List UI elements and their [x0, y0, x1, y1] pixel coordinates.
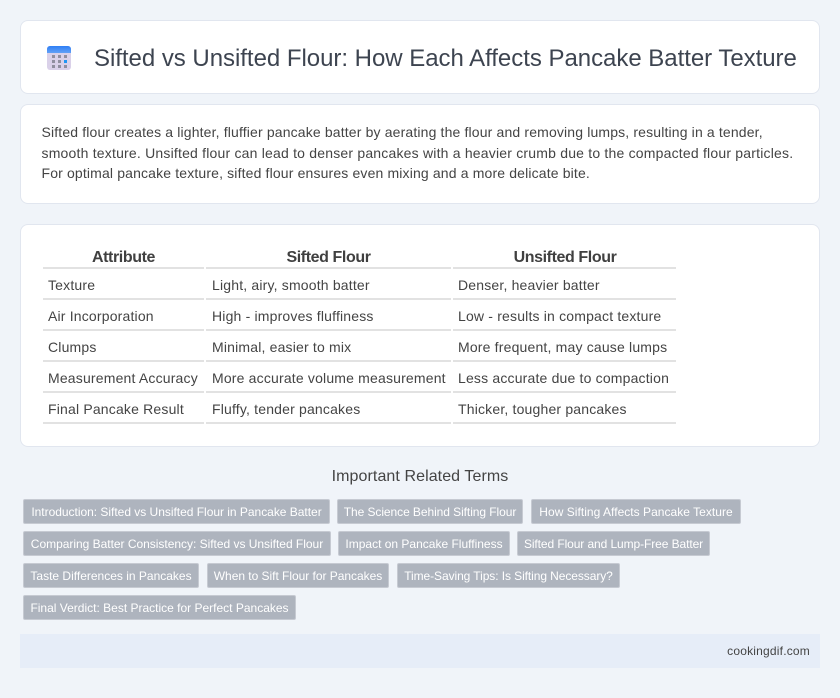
comparison table: Texture	[48, 277, 95, 293]
intro text: For optimal pancake texture, sifted flour ensures even mixing and a more delicate bite.	[42, 165, 590, 181]
comparison table	[43, 249, 676, 424]
comparison table: Attribute	[92, 249, 155, 266]
intro panel	[20, 104, 820, 204]
comparison table: Thicker, tougher pancakes	[458, 401, 627, 417]
comparison table: Minimal, easier to mix	[212, 339, 351, 355]
comparison table: Clumps	[48, 339, 97, 355]
related term tags: Taste Differences in Pancakes	[30, 569, 192, 583]
related term tags: Introduction: Sifted vs Unsifted Flour in Pancake Batter	[31, 505, 322, 519]
comparison table: More accurate volume measurement	[212, 370, 446, 386]
footer site name: cookingdif.com	[727, 644, 810, 658]
comparison table: Measurement Accuracy	[48, 370, 198, 386]
comparison table: Air Incorporation	[48, 308, 154, 324]
related term tags: Time-Saving Tips: Is Sifting Necessary?	[404, 569, 613, 583]
comparison table: Sifted Flour	[286, 249, 371, 266]
related terms heading: Important Related Terms	[332, 468, 508, 485]
intro text	[42, 124, 793, 181]
comparison table: Denser, heavier batter	[458, 277, 600, 293]
comparison table: High - improves fluffiness	[212, 308, 374, 324]
header panel	[20, 20, 820, 94]
intro text: smooth texture. Unsifted flour can lead to denser pancakes with a heavier crumb due to the compacted flour particles.	[42, 144, 793, 160]
comparison table panel	[20, 224, 820, 447]
comparison table: Fluffy, tender pancakes	[212, 401, 360, 417]
related term tags: Final Verdict: Best Practice for Perfect Pancakes	[30, 601, 289, 615]
comparison table: Low - results in compact texture	[458, 308, 661, 324]
comparison table: Light, airy, smooth batter	[212, 277, 370, 293]
related term tags	[23, 499, 741, 620]
related term tags: When to Sift Flour for Pancakes	[214, 569, 382, 583]
icon: calendar	[47, 46, 71, 70]
title: Sifted vs Unsifted Flour: How Each Affects Pancake Batter Texture	[94, 45, 797, 72]
comparison table: Unsifted Flour	[514, 249, 616, 266]
related term tags: The Science Behind Sifting Flour	[344, 505, 516, 519]
footer bar	[20, 634, 820, 668]
related term tags: Impact on Pancake Fluffiness	[345, 537, 503, 551]
comparison table: Final Pancake Result	[48, 401, 184, 417]
related term tags: Sifted Flour and Lump-Free Batter	[524, 537, 703, 551]
intro text: Sifted flour creates a lighter, fluffier pancake batter by aerating the flour and removing lumps, resulting in a tender,	[42, 124, 763, 140]
related term tags: Comparing Batter Consistency: Sifted vs Unsifted Flour	[31, 537, 323, 551]
comparison table: Less accurate due to compaction	[458, 370, 669, 386]
related term tags: How Sifting Affects Pancake Texture	[539, 505, 733, 519]
comparison table: More frequent, may cause lumps	[458, 339, 667, 355]
